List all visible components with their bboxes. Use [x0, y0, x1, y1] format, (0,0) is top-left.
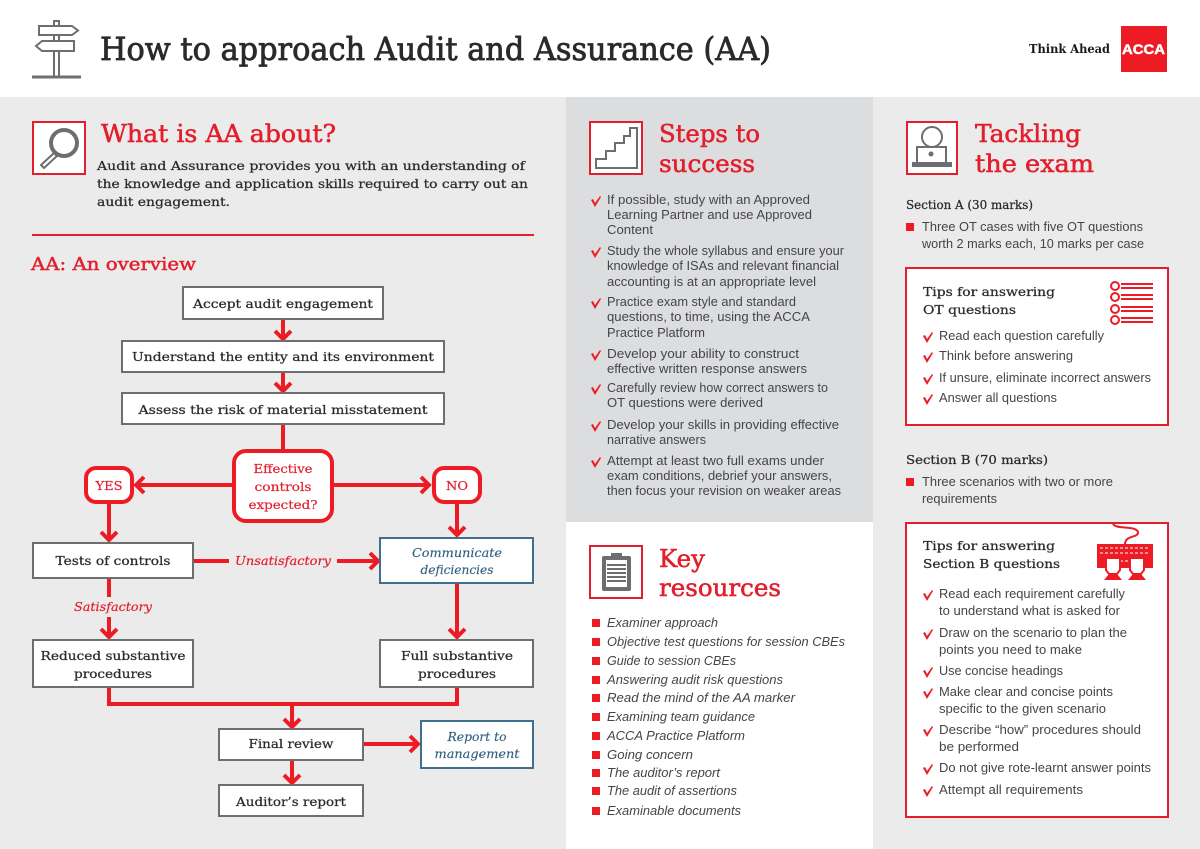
step: tests of controls: Tests of controls: [56, 553, 170, 568]
icon: person at laptop: [907, 122, 957, 174]
bullet: Section B: requirements: [922, 492, 997, 506]
heading: Key resources: resources: [659, 574, 781, 602]
checklist: steps: Learning Partner and use Approved: [607, 208, 812, 222]
checklist: steps: Content: [607, 223, 654, 237]
checklist: OT tips: Read each question carefully: [939, 329, 1105, 343]
step: auditor's report: Auditor’s report: [235, 794, 346, 809]
checklist: steps: OT questions were derived: [607, 396, 763, 410]
heading: Tackling the exam: [975, 120, 1094, 178]
checklist: Section B tips: Use concise headings: [939, 664, 1063, 678]
step: assess the risk: [122, 393, 444, 424]
step: reduced substantive procedures: procedures: [74, 666, 152, 681]
decision: effective controls expected: Effective: [254, 461, 312, 476]
list: resources: ACCA Practice Platform: [606, 729, 745, 743]
step: full substantive procedures: Full substantive: [401, 648, 513, 663]
step: full substantive procedures: [380, 640, 533, 687]
checklist: steps: Develop your ability to construct: [607, 347, 800, 361]
logo: Think Ahead ACCA: [1029, 26, 1167, 72]
checklist: steps: then focus your revision on weaker areas: [607, 484, 841, 498]
checklist: OT tips: If unsure, eliminate incorrect answers: [939, 371, 1151, 385]
step: tests of controls: [33, 543, 193, 578]
heading: Section A: Section A (30 marks): [906, 197, 1033, 212]
list: resources: Examining team guidance: [607, 710, 755, 724]
checklist: Section B tips: to understand what is asked for: [939, 604, 1120, 618]
step: reduced substantive procedures: Reduced substantive: [40, 648, 186, 663]
title: How to approach Audit and Assurance (AA): [100, 30, 771, 68]
list: resources: The audit of assertions: [607, 784, 738, 798]
list: resources: Examinable documents: [607, 804, 742, 818]
callout heading: [923, 284, 1055, 317]
intro text: audit engagement.: [97, 194, 230, 209]
step: understand the entity: Understand the entity and its environment: [132, 349, 434, 364]
icon: keyboard and hands: [1097, 523, 1153, 580]
checklist: OT tips: [923, 329, 1151, 405]
heading: Steps to success: success: [659, 150, 755, 178]
panel: Steps to success: [566, 97, 873, 522]
checklist: steps: effective written response answers: [607, 362, 807, 376]
decision: NO: [434, 468, 480, 502]
bullet: Section A: Three OT cases with five OT questions: [922, 220, 1143, 234]
checklist: steps: Practice Platform: [607, 326, 705, 340]
heading: Key resources: [659, 545, 781, 602]
checklist: Section B tips: Attempt all requirements: [939, 783, 1083, 797]
checklist: steps: Attempt at least two full exams under: [607, 454, 824, 468]
decision: effective controls expected: controls: [254, 479, 312, 494]
label: unsatisfactory: Unsatisfactory: [235, 553, 332, 568]
decision: YES: YES: [94, 478, 122, 493]
checklist: Section B tips: Draw on the scenario to plan the: [939, 626, 1127, 640]
step: assess the risk: Assess the risk of material misstatement: [137, 402, 428, 417]
decision: effective controls expected: expected?: [248, 497, 318, 512]
step: final review: Final review: [248, 736, 334, 751]
step: auditor's report: [219, 785, 363, 816]
checklist: steps: knowledge of ISAs and relevant financial: [607, 259, 839, 273]
step: communicate deficiencies: Communicate: [412, 545, 502, 560]
header: [32, 21, 1167, 77]
checklist: Section B tips: Do not give rote-learnt answer points: [939, 761, 1151, 775]
bullet: Section A: worth 2 marks each, 10 marks per case: [921, 237, 1144, 251]
list: resources: [592, 616, 846, 818]
intro text: the knowledge and application skills required to carry out an: [97, 176, 528, 191]
checklist: steps: questions, to time, using the ACCA: [607, 310, 811, 324]
checklist: Section B tips: points you need to make: [939, 643, 1082, 657]
bullet: Section A: [906, 220, 1144, 251]
checklist: steps: Develop your skills in providing effective: [607, 418, 839, 432]
checklist: Section B tips: specific to the given scenario: [939, 702, 1106, 716]
logo: Think Ahead ACCA: ACCA: [1122, 41, 1165, 57]
step: full substantive procedures: procedures: [418, 666, 496, 681]
list: resources: Guide to session CBEs: [607, 654, 737, 668]
step: report to management: [421, 721, 533, 768]
decision: YES: [86, 468, 132, 502]
heading: AA An overview: AA: An overview: [30, 254, 197, 275]
heading: Steps to success: Steps to: [659, 120, 760, 148]
callout heading: [923, 538, 1060, 571]
step: understand the entity: [122, 341, 444, 372]
checklist: OT tips: Answer all questions: [939, 391, 1057, 405]
list: resources: Objective test questions for session CBEs: [607, 635, 846, 649]
checklist: steps: Study the whole syllabus and ensure your: [607, 244, 844, 258]
panel: What is AA about: [0, 97, 566, 849]
checklist: steps: [591, 193, 844, 498]
list: resources: Read the mind of the AA marker: [607, 691, 796, 705]
arrows: [101, 319, 465, 783]
checklist: steps: If possible, study with an Approved: [607, 193, 810, 207]
flowchart: [33, 287, 533, 816]
heading: Key resources: Key: [659, 545, 705, 573]
decision: effective controls expected: [234, 451, 332, 521]
label: satisfactory: Satisfactory: [74, 599, 153, 614]
heading: Section B: Section B (70 marks): [906, 452, 1048, 467]
step: final review: [219, 729, 363, 760]
checklist: steps: accounting is at an appropriate level: [607, 275, 816, 289]
heading: Steps to success: [659, 120, 760, 178]
callout heading: Tips for answering: [923, 538, 1055, 553]
checklist: Section B tips: Read each requirement carefully: [939, 587, 1126, 601]
step: reduced substantive procedures: [33, 640, 193, 687]
step: communicate deficiencies: deficiencies: [420, 562, 494, 577]
intro text: Audit and Assurance provides you with an understanding of: [96, 158, 527, 173]
checklist: steps: exam conditions, debrief your answers,: [607, 469, 832, 483]
list: resources: The auditor’s report: [607, 766, 721, 780]
heading: Tackling the exam: the exam: [975, 150, 1094, 178]
callout heading: Section B questions: [923, 556, 1060, 571]
icon: question list: [1111, 282, 1153, 324]
step: report to management: management: [434, 746, 520, 761]
checklist: OT tips: Think before answering: [939, 349, 1073, 363]
step: accept audit engagement: Accept audit engagement: [192, 296, 373, 311]
checklist: steps: Practice exam style and standard: [607, 295, 796, 309]
callout: OT tips: [906, 268, 1168, 425]
checklist: steps: narrative answers: [607, 433, 706, 447]
step: report to management: Report to: [447, 729, 506, 744]
intro text: [96, 158, 528, 209]
logo: Think Ahead ACCA: Think Ahead: [1029, 42, 1111, 56]
step: accept audit engagement: [183, 287, 383, 319]
checklist: Section B tips: be performed: [939, 740, 1019, 754]
panel: Key resources: [566, 522, 873, 849]
icon: stairs: [590, 122, 642, 174]
list: resources: Examiner approach: [607, 616, 718, 630]
icon: magnifying glass: [33, 122, 85, 174]
list: resources: Going concern: [607, 748, 693, 762]
list: resources: Answering audit risk questions: [606, 673, 784, 687]
icon: signpost: [32, 21, 81, 77]
callout heading: OT questions: [923, 302, 1016, 317]
callout heading: Tips for answering: [923, 284, 1055, 299]
checklist: Section B tips: [923, 587, 1151, 797]
checklist: Section B tips: Make clear and concise points: [939, 685, 1113, 699]
panel: Tackling the exam: [873, 97, 1200, 849]
heading: What is AA about?: What is AA about?: [101, 120, 336, 148]
decision: NO: NO: [446, 478, 468, 493]
bullet: Section B: [906, 475, 1113, 506]
heading: Tackling the exam: Tackling: [975, 120, 1081, 148]
checklist: steps: Carefully review how correct answers to: [607, 381, 828, 395]
callout: Section B tips: [906, 523, 1168, 817]
bullet: Section B: Three scenarios with two or more: [922, 475, 1113, 489]
checklist: Section B tips: Describe “how” procedures should: [939, 723, 1141, 737]
step: communicate deficiencies: [380, 538, 533, 583]
icon: clipboard: [590, 546, 642, 598]
